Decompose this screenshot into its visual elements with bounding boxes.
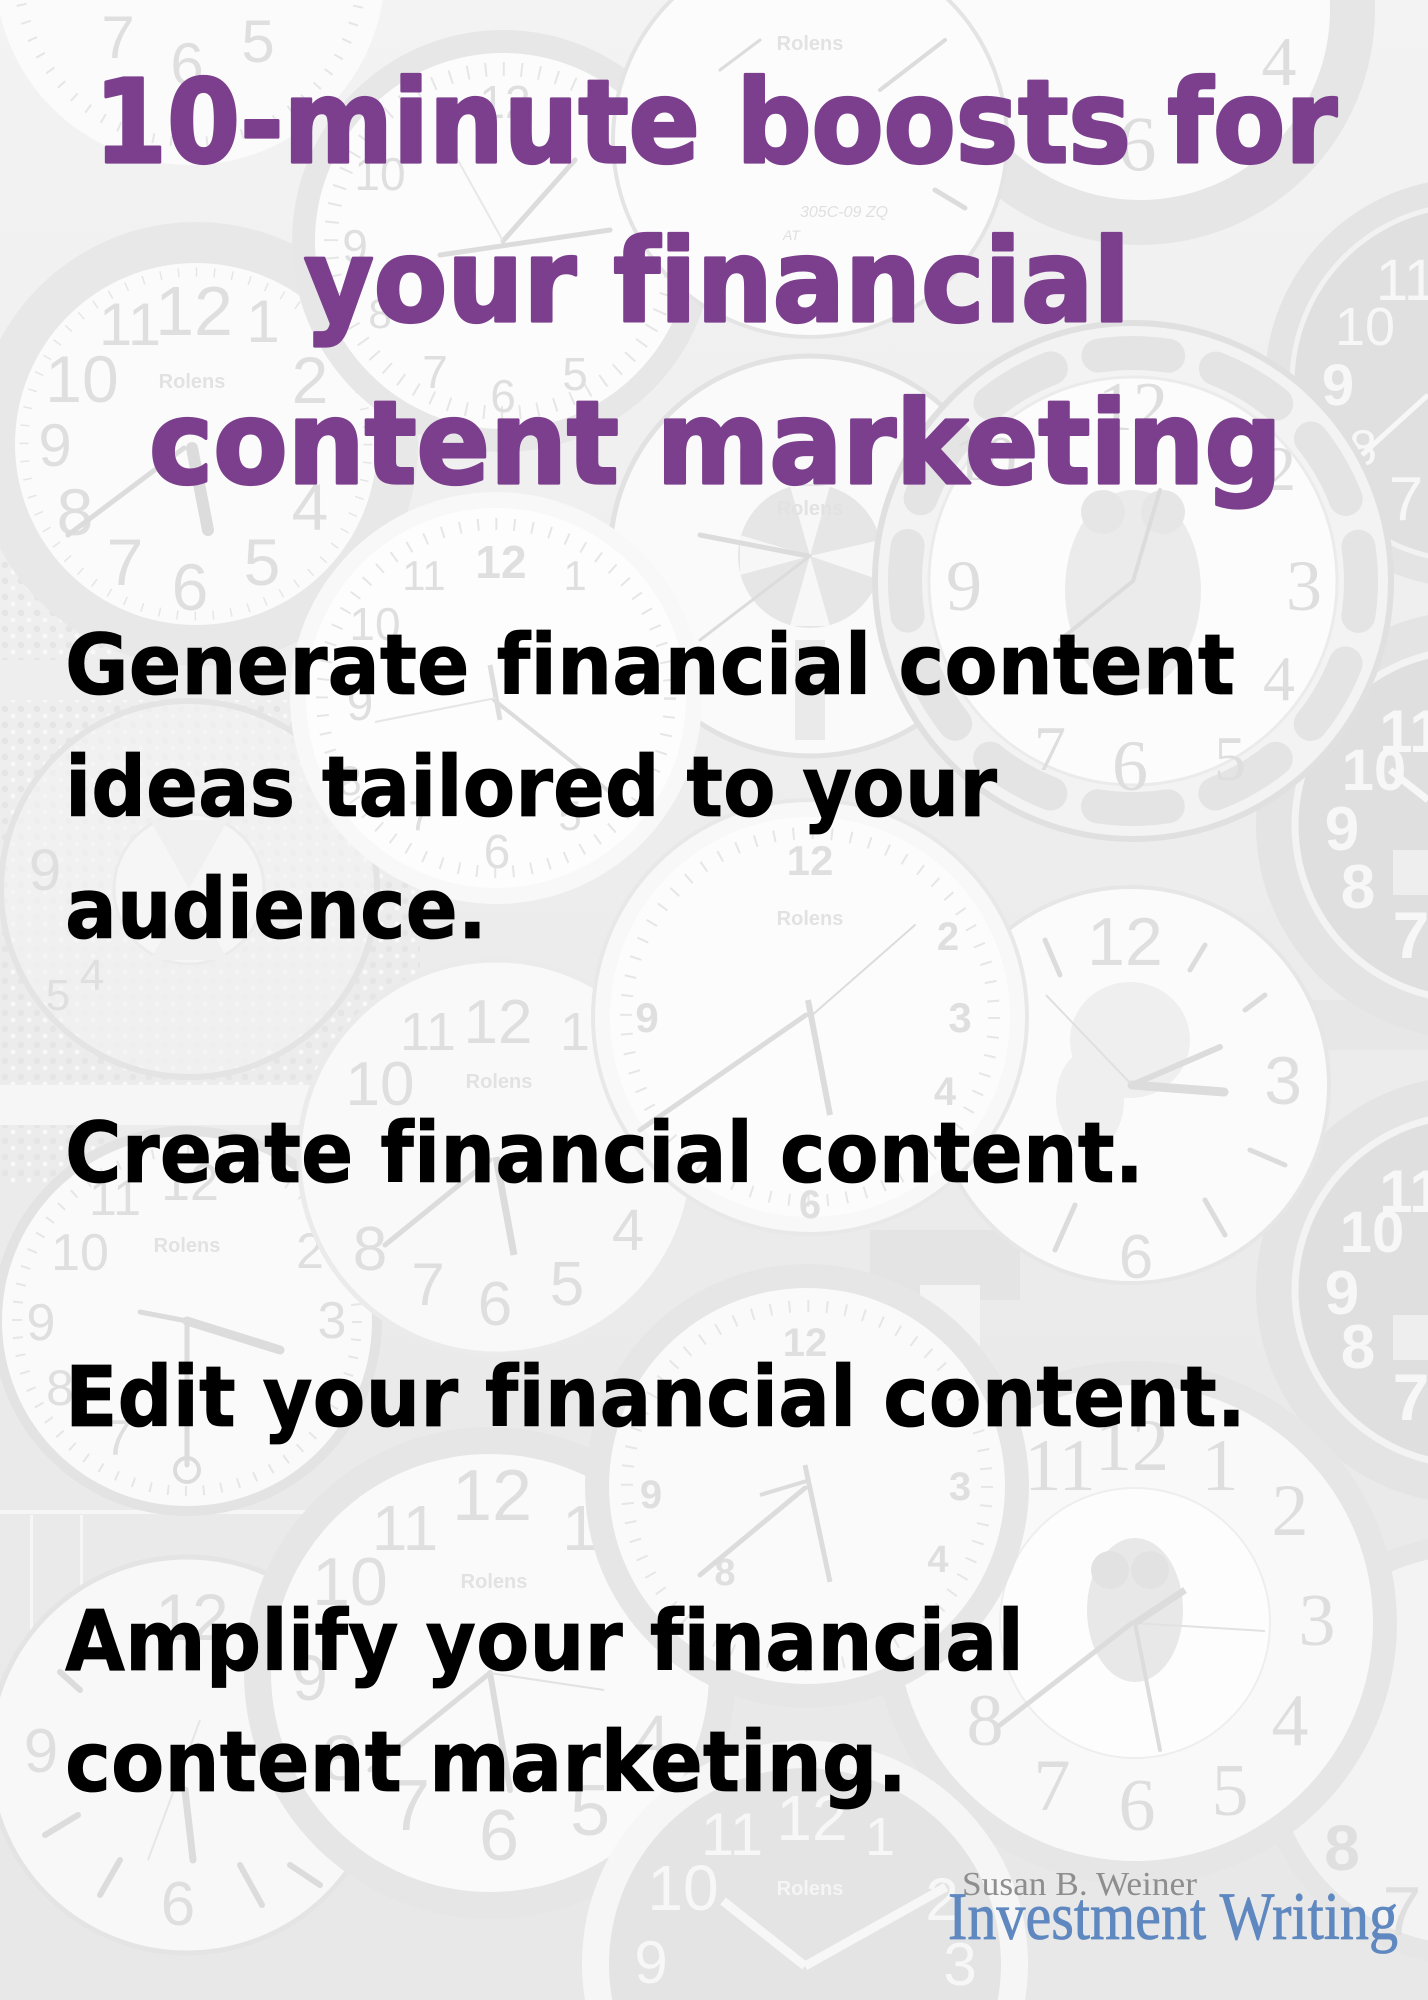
clock: owl rotary dial: 5 — [1214, 723, 1246, 794]
clock: bottom centre dark: 3 — [943, 1931, 977, 1998]
clock: bottom centre-left: Rolens — [461, 1571, 527, 1593]
title: content marketing — [149, 377, 1282, 511]
title: 10-minute boosts for — [94, 56, 1337, 190]
clock: centre large: 3 — [948, 994, 972, 1041]
clock: upper centre-left: 8 — [368, 290, 392, 337]
clock: centre-left: 11 — [402, 552, 446, 599]
clock: bottom centre dark: 11 — [701, 1801, 763, 1868]
clock: centre large: 12 — [787, 837, 833, 884]
text block: edit: Edit your financial content. — [65, 1348, 1246, 1446]
clock: centre large: 2 — [937, 915, 959, 959]
clock: owl rotary dial: 2 — [1264, 433, 1296, 504]
title: your financial — [304, 215, 1130, 349]
clock: upper centre-left: 9 — [342, 220, 368, 272]
clock: bottom centre-left: 4 — [634, 1702, 670, 1774]
clock: upper left large — [0, 222, 418, 666]
clock: top centre: Rolens — [777, 33, 843, 55]
text block: amplify — [65, 1592, 1024, 1811]
title — [94, 56, 1337, 511]
clock: centre large: 6 — [799, 1183, 821, 1227]
clock: top right: 4 — [1262, 24, 1296, 101]
text block: amplify: Amplify your financial — [65, 1592, 1024, 1690]
clock: centre with fan dial: Rolens — [777, 498, 843, 520]
clock: bottom centre dark: 12 — [776, 1782, 848, 1854]
clock: top right: 6 — [1118, 100, 1156, 187]
clock: lower left: 9 — [27, 1294, 55, 1352]
clock: upper left large: 5 — [244, 525, 280, 599]
clock: bottom centre-left: 1 — [562, 1492, 598, 1564]
clock: top centre: AT — [782, 227, 801, 243]
clock: upper left large: 4 — [292, 470, 328, 544]
text block: generate ideas: audience. — [65, 860, 487, 958]
clock: lower left: 8 — [46, 1360, 74, 1416]
clock: left jewelled: 9 — [29, 838, 61, 903]
clock: top centre — [613, 0, 1007, 337]
clock: bottom centre-left: 11 — [372, 1492, 438, 1564]
clock: centre-left: 6 — [484, 826, 510, 879]
clock: bottom centre-left: 10 — [312, 1544, 388, 1620]
clock: lower left — [0, 1126, 382, 1516]
clock: bottom centre dark — [582, 1741, 1028, 2000]
clock: lower right owl: 3 — [1298, 1580, 1336, 1662]
clock: centre lower — [585, 1264, 1029, 1708]
clock: dark right lower: 8 — [1341, 1313, 1375, 1382]
clock: owl rotary dial: 3 — [1286, 546, 1322, 626]
clock: centre-left — [290, 492, 702, 904]
clock: centre-left: 7 — [408, 792, 432, 839]
clock: lower left: 12 — [161, 1154, 219, 1212]
clock: centre lower: 3 — [949, 1465, 971, 1509]
clock: top left: 5 — [241, 8, 275, 75]
text block: generate ideas — [65, 616, 1235, 958]
clock: centre-left: 8 — [338, 757, 362, 804]
clock: right middle owl: 6 — [1119, 1223, 1153, 1292]
clock: upper left large: 12 — [155, 272, 233, 350]
clock: lower left: 2 — [296, 1223, 324, 1279]
clock: bottom centre-left: 9 — [292, 1642, 328, 1714]
clock: bottom centre dark: Rolens — [777, 1878, 843, 1900]
text block: generate ideas: Generate financial content — [65, 616, 1235, 714]
clock: owl rotary dial: 7 — [1034, 713, 1066, 784]
clock: bottom centre-left: 7 — [390, 1766, 430, 1846]
clock: dark right upper: 10 — [1335, 297, 1395, 357]
clock: dark right upper — [1265, 178, 1428, 588]
clock: dark right middle: 10 — [1342, 738, 1406, 803]
clock: centre large: Rolens — [777, 908, 843, 930]
clock: centre-left lower: Rolens — [466, 1071, 532, 1093]
clock: bottom right light: 8 — [1324, 1812, 1360, 1884]
clock: lower right owl: 8 — [966, 1680, 1004, 1762]
clock: top left — [0, 0, 385, 165]
clock: upper centre-left: 6 — [490, 370, 516, 422]
clock: upper centre-left: 12 — [479, 76, 531, 128]
clock: owl rotary dial: 6 — [1112, 726, 1148, 806]
clock: upper centre-left: 10 — [354, 148, 406, 200]
clock: centre-left lower: 5 — [550, 1250, 584, 1319]
clock: dark right lower — [1256, 1076, 1428, 1504]
clock: owl rotary dial: 4 — [1263, 643, 1295, 714]
clock: lower right owl: 4 — [1272, 1680, 1308, 1762]
text block: amplify: content marketing. — [65, 1713, 907, 1811]
clock: top left: 7 — [101, 4, 135, 71]
clock: dark right upper: 7 — [1389, 465, 1423, 534]
clock: centre-left lower: 4 — [612, 1198, 644, 1263]
clock: upper left large: 9 — [38, 412, 72, 479]
clock: lower left: Rolens — [154, 1235, 220, 1257]
text block: create: Create financial content. — [65, 1104, 1144, 1202]
clock: centre-left: 9 — [347, 678, 373, 731]
clock: upper left large: Rolens — [159, 371, 225, 393]
clock: upper left large: 7 — [107, 525, 143, 599]
clock: owl rotary dial — [875, 323, 1391, 839]
clock: upper left large: 10 — [45, 342, 119, 416]
clock: lower left: 3 — [318, 1292, 346, 1350]
clock: bottom centre-left — [244, 1427, 736, 1919]
logo: Susan B. Weiner Investment Writing: Susan B. Weiner — [962, 1866, 1198, 1903]
clock: centre-left lower: 8 — [353, 1215, 387, 1284]
clock: bottom centre-left: 8 — [322, 1722, 358, 1794]
clock: lower right owl: 1 — [1202, 1425, 1238, 1507]
clock: lower right owl — [873, 1361, 1397, 1885]
clock: upper centre-left: 5 — [562, 348, 588, 400]
clock: right middle owl — [933, 887, 1329, 1292]
clock: lower left: 10 — [51, 1224, 109, 1282]
clock: lower right owl: 6 — [1118, 1765, 1156, 1847]
clock: centre lower: 8 — [714, 1552, 736, 1594]
text block: generate ideas: ideas tailored to your — [65, 738, 998, 836]
clock: dark right lower: 9 — [1325, 1259, 1359, 1328]
clock: centre-left lower: 6 — [478, 1270, 512, 1339]
clock: upper left large: 8 — [57, 475, 93, 549]
clock: upper left large: 6 — [172, 550, 208, 624]
clock: dark right middle: 9 — [1325, 795, 1359, 864]
clock: top centre: 305C-09 ZQ — [800, 204, 888, 221]
clock: left jewelled: 5 — [46, 971, 70, 1020]
clock: left jewelled: 4 — [80, 951, 104, 1000]
clock: lower left: 7 — [104, 1410, 132, 1466]
clock: centre-left lower: 12 — [464, 988, 532, 1057]
clock: bottom centre-left: 5 — [570, 1771, 610, 1851]
clock: upper left large: 1 — [246, 288, 280, 355]
clock: centre lower: 4 — [927, 1539, 949, 1581]
clock: left jewelled — [1, 701, 377, 1077]
clock: dark right upper: 8 — [1349, 420, 1377, 476]
clock: centre-left lower: 10 — [346, 1050, 414, 1119]
clock: bottom centre-left: 6 — [479, 1796, 519, 1876]
clock: owl rotary dial: 12 — [1098, 369, 1168, 446]
clock: bottom right light — [1255, 1535, 1428, 1965]
clock: centre-left lower: 11 — [400, 1002, 456, 1062]
clock: centre-left: 1 — [563, 552, 587, 599]
clock: dark right lower: 10 — [1340, 1200, 1404, 1265]
clock: dark right middle — [1256, 611, 1428, 1039]
clock: bottom left: 9 — [24, 1717, 58, 1786]
clock: dark right upper: 9 — [1322, 353, 1354, 418]
clock: upper left large: 11 — [99, 291, 161, 358]
clock: centre large — [593, 800, 1027, 1234]
clock: bottom left: 6 — [161, 1870, 195, 1939]
clock: centre-left: 5 — [558, 792, 582, 839]
clock: right middle owl: 3 — [1264, 1043, 1302, 1119]
clock: centre with fan dial — [610, 356, 1010, 756]
clock: centre lower: 9 — [640, 1473, 662, 1517]
clock: upper left large: 2 — [292, 343, 328, 417]
clock: lower right owl: 5 — [1212, 1750, 1248, 1832]
clock: right middle owl: 12 — [1087, 904, 1163, 980]
clock: owl rotary dial: 9 — [946, 546, 982, 626]
clock: centre large: 9 — [635, 994, 659, 1041]
clock: centre-left lower: 7 — [411, 1251, 445, 1318]
clock: bottom centre-left: 12 — [452, 1456, 532, 1536]
clock: centre-left: 12 — [475, 536, 527, 588]
clock: upper centre-left — [292, 30, 714, 452]
clock: centre-left lower: 1 — [560, 1002, 590, 1062]
clock: bottom left — [0, 1557, 385, 1953]
clock: top left: 6 — [170, 31, 204, 98]
clock: owl rotary dial: 10 — [953, 423, 1017, 494]
clock: upper centre-left: 7 — [422, 346, 448, 398]
clock: centre large: 4 — [934, 1070, 957, 1114]
clock: lower right owl: 7 — [1034, 1745, 1070, 1827]
clock: dark right middle: 8 — [1341, 853, 1375, 922]
clock: bottom centre dark: 2 — [925, 1866, 959, 1933]
clock: top right — [905, 0, 1375, 245]
clock: lower left: 11 — [89, 1170, 141, 1226]
clock: bottom left: 12 — [155, 1580, 229, 1654]
clock: lower right owl: 2 — [1272, 1470, 1308, 1552]
clock: centre-left lower — [299, 960, 693, 1354]
clock: lower right owl: 11 — [1024, 1425, 1096, 1507]
clock: centre-left: 10 — [349, 598, 401, 650]
clock: bottom centre dark: 1 — [865, 1807, 895, 1867]
clock: bottom right light: 7 — [1383, 1872, 1421, 1950]
clock: centre lower: 12 — [783, 1321, 827, 1365]
clock: bottom centre dark: 9 — [634, 1929, 668, 1996]
clock: bottom centre dark: 10 — [647, 1852, 719, 1924]
clock: lower right owl: 12 — [1095, 1405, 1169, 1487]
